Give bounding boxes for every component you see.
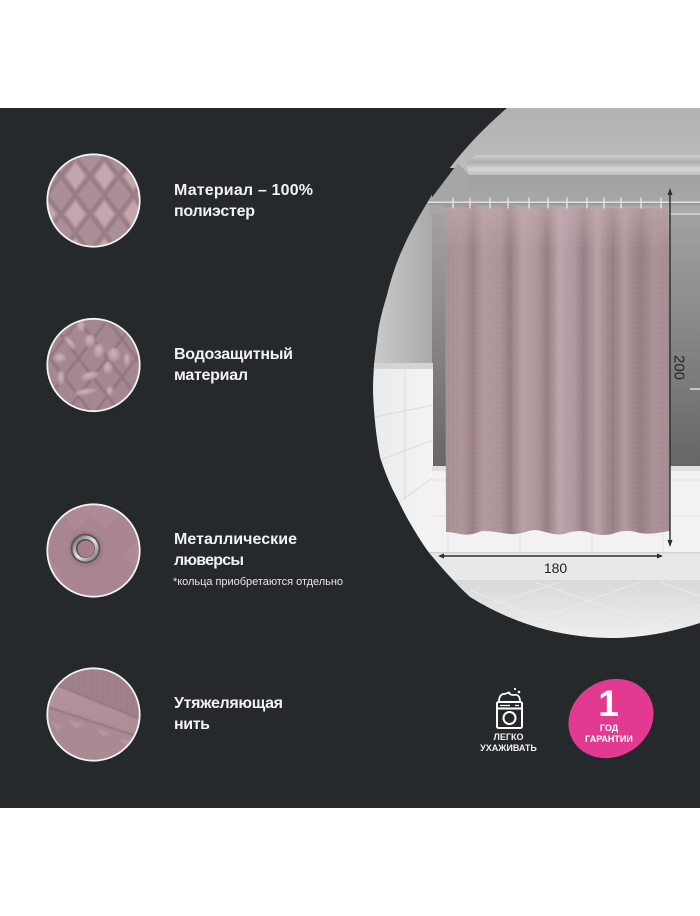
text: weighted thread: Утяжеляющая bbox=[174, 695, 283, 712]
text: material: Материал – 100% bbox=[174, 182, 313, 199]
caption: ГОД bbox=[600, 723, 619, 733]
dimension arrow: width 180 bbox=[438, 554, 663, 576]
text: grommets bbox=[174, 531, 297, 569]
recess wall bbox=[432, 214, 700, 466]
text: grommets: Металлические bbox=[174, 531, 297, 548]
badge: 1 year warranty bbox=[554, 664, 668, 773]
tub base bbox=[420, 552, 700, 582]
curtain cloth bbox=[445, 205, 670, 535]
label: 200: 200 bbox=[670, 355, 688, 380]
badge: easy care bbox=[480, 688, 537, 753]
icon: fabric swatch with water drops bbox=[45, 317, 142, 414]
text: waterproof: Водозащитный bbox=[174, 346, 293, 363]
feature: metal grommets bbox=[45, 502, 343, 600]
text: material: полиэстер bbox=[174, 203, 255, 220]
text: weighted thread bbox=[174, 695, 283, 733]
text: easy care: УХАЖИВАТЬ bbox=[480, 743, 537, 753]
footnote: *кольца приобретаются отдельно bbox=[173, 576, 343, 588]
photo: bathroom with shower curtain bbox=[370, 108, 700, 640]
pink blob bbox=[554, 664, 668, 773]
feature: weighted thread bbox=[45, 666, 283, 763]
text: grommets: люверсы bbox=[174, 552, 244, 569]
caption: ГАРАНТИИ bbox=[585, 734, 633, 744]
floor tiles bbox=[453, 580, 700, 638]
number: 1 bbox=[598, 683, 619, 724]
text: material bbox=[174, 182, 313, 220]
upper wall behind rod bbox=[468, 175, 700, 214]
curtain rod bbox=[428, 201, 700, 205]
text: weighted thread: нить bbox=[174, 716, 210, 733]
icon: fabric swatch with hem bbox=[45, 666, 142, 763]
icon: washing machine bbox=[497, 688, 522, 728]
ceiling bbox=[450, 108, 700, 168]
curtain bbox=[445, 205, 670, 535]
cornice moulding bbox=[466, 155, 700, 175]
feature: waterproof material bbox=[45, 317, 293, 414]
bathtub bbox=[432, 466, 700, 553]
dark background panel bbox=[0, 108, 700, 808]
icon: fabric swatch with metal grommet bbox=[45, 502, 142, 600]
label: 180: 180 bbox=[544, 560, 567, 576]
text: waterproof: материал bbox=[174, 367, 248, 384]
wall tiles bbox=[370, 363, 433, 563]
feature: material 100% polyester bbox=[45, 152, 313, 249]
text: waterproof bbox=[174, 346, 293, 384]
dimension arrow: height 200 bbox=[668, 188, 688, 547]
icon: diamond fabric swatch bbox=[45, 152, 142, 249]
curtain rings bbox=[453, 198, 661, 208]
text: easy care: ЛЕГКО bbox=[494, 732, 523, 742]
left wall bbox=[374, 194, 432, 364]
